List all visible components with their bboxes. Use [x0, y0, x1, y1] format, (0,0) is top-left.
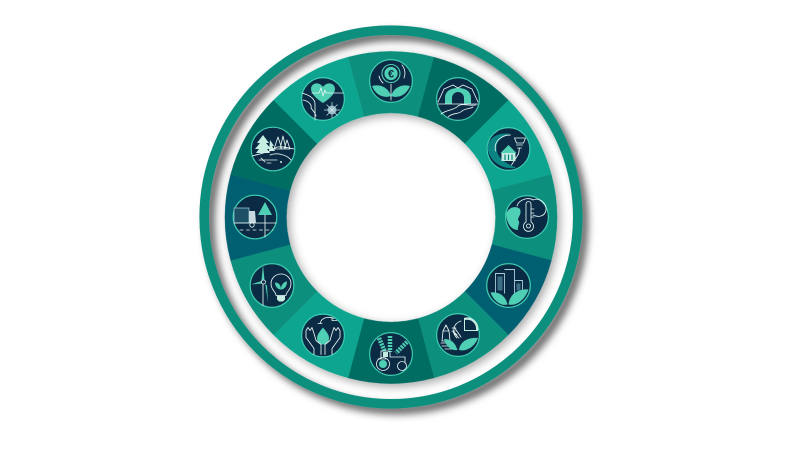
segment: forest [226, 97, 325, 204]
icon: euro plant [370, 60, 412, 102]
icon: tractor and wheat [370, 333, 412, 375]
icon: lighthouse and chart [437, 314, 479, 356]
icon: truck and warning sign [233, 195, 277, 239]
icon: euro plant: € [388, 68, 394, 80]
icon: water in hands [302, 314, 344, 357]
segment: tunnel [404, 52, 511, 152]
segment: finance [348, 52, 434, 117]
icon: wind turbine and bulb [250, 264, 294, 307]
segment: health [271, 52, 378, 152]
segment: transport [225, 175, 290, 260]
icon: heart and virus [302, 78, 344, 120]
icon: tunnel and handshake [437, 78, 479, 120]
segment: water [271, 283, 378, 383]
icon: city and leaves [487, 264, 530, 307]
segment: coast [404, 283, 511, 383]
segment: house [457, 97, 556, 204]
segmented band [225, 52, 557, 383]
outer ring [204, 30, 578, 404]
icon: house and storm [487, 128, 530, 170]
segment: energy [226, 231, 325, 338]
segment: climate [492, 175, 557, 260]
segment: city [457, 231, 556, 338]
segment: agriculture [348, 318, 434, 383]
icon: forest landscape [251, 127, 295, 171]
icon: tree and thermometer [506, 196, 548, 238]
